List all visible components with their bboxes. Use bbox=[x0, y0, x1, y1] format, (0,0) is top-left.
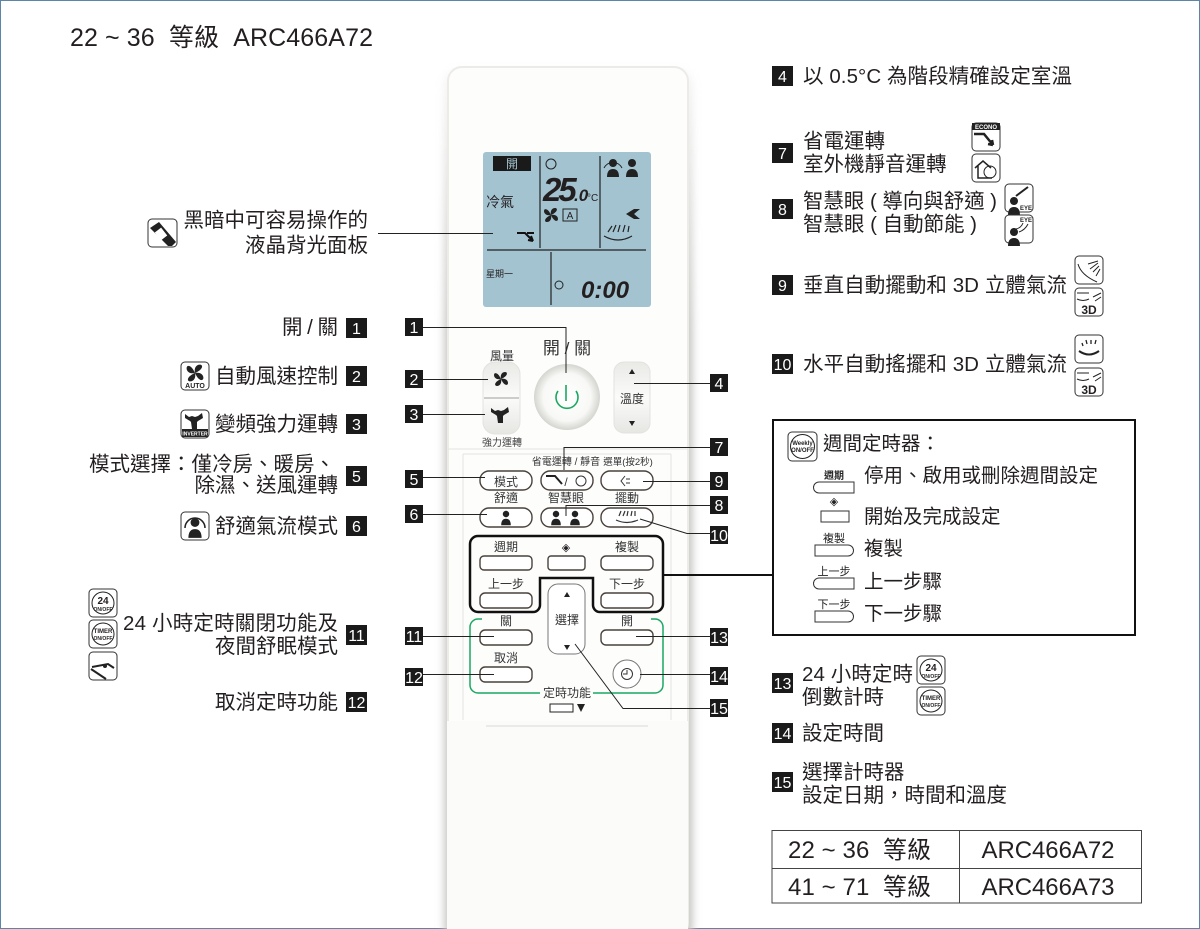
left: item 6: 舒適氣流模式 bbox=[215, 515, 338, 538]
timer button group outline bbox=[470, 614, 663, 712]
right: item 4: 以 0.5°C 為階段精確設定室溫 bbox=[803, 65, 1072, 88]
battery cover bbox=[447, 721, 688, 929]
row: next step bbox=[815, 598, 942, 625]
timer button group outline: 開 bbox=[621, 614, 633, 628]
row: weekly setting: 週期 bbox=[824, 469, 844, 482]
left: item 2: AUTO bbox=[185, 383, 205, 390]
left: item 11: ON/OFF bbox=[94, 636, 112, 642]
row: copy: 複製 bbox=[864, 538, 903, 560]
left: item 11: 夜間舒眠模式 bbox=[215, 635, 338, 658]
weekly timer button group outline: 複製 bbox=[615, 539, 639, 554]
upper button panel: / bbox=[564, 475, 568, 489]
right: item 8 bbox=[772, 184, 1033, 246]
right: item 7: 省電運轉 bbox=[803, 130, 885, 153]
right: item 7 bbox=[772, 123, 1000, 182]
right: item 13: ON/OFF bbox=[922, 674, 940, 680]
right: item 13 bbox=[772, 656, 945, 715]
callout tags on remote: 6 bbox=[410, 507, 419, 524]
callout tags on remote bbox=[405, 318, 728, 718]
weekly timer button group outline: 下一步 bbox=[609, 577, 645, 591]
left: item 11: 11 bbox=[348, 628, 365, 645]
right: item 13: ON/OFF bbox=[922, 703, 940, 709]
right: item 9: 垂直自動擺動和 3D 立體氣流 bbox=[803, 274, 1067, 297]
callout tags on remote: 4 bbox=[715, 376, 724, 393]
weekly timer button group outline: 週期 bbox=[494, 539, 518, 554]
left: item 1 bbox=[282, 316, 367, 339]
weekly timer button group outline bbox=[470, 536, 663, 612]
callout tags on remote: 1 bbox=[410, 320, 419, 337]
left: item 3: 變頻強力運轉 bbox=[215, 413, 338, 436]
left: item 11: TIMER bbox=[94, 629, 113, 635]
left: item 6: 6 bbox=[352, 519, 361, 536]
callout tags on remote: 12 bbox=[405, 670, 423, 687]
callout tags on remote: 5 bbox=[410, 472, 419, 489]
left: item 3 bbox=[181, 410, 367, 438]
row: previous step: 上一步驟 bbox=[864, 571, 942, 593]
left: item 11 bbox=[89, 589, 367, 680]
row: start and finish: 開始及完成設定 bbox=[864, 506, 1001, 528]
remote control bbox=[444, 67, 693, 929]
left: item 1: 開 / 關 bbox=[282, 316, 338, 339]
LCD screen: 25 bbox=[542, 171, 577, 208]
right: item 9: 9 bbox=[778, 278, 787, 295]
upper button panel: 舒適 bbox=[494, 490, 518, 505]
weekly timer button group outline: ◈ bbox=[562, 542, 571, 554]
model table: ARC466A72 bbox=[982, 837, 1114, 864]
right: item 10: 水平自動搖擺和 3D 立體氣流 bbox=[803, 353, 1067, 376]
right: item 8: 8 bbox=[778, 202, 787, 219]
model table bbox=[772, 830, 1142, 903]
row: weekly setting bbox=[814, 465, 1098, 493]
upper button panel: 擺動 bbox=[615, 490, 639, 505]
LCD screen: .0 bbox=[574, 186, 589, 205]
row: copy bbox=[815, 531, 903, 560]
weekly timer button group outline: 上一步 bbox=[488, 577, 524, 591]
panel: weekly timer bbox=[773, 420, 1135, 635]
callout tags on remote: 2 bbox=[410, 372, 419, 389]
callout tags on remote: 3 bbox=[410, 407, 419, 424]
left: item 11: 24 bbox=[97, 596, 109, 607]
left: item 3: INVERTER bbox=[182, 432, 208, 438]
right: item 14: 14 bbox=[774, 726, 792, 743]
left: item 11: ON/OFF bbox=[94, 607, 112, 613]
right: item 8: 智慧眼 ( 自動節能 ) bbox=[803, 213, 977, 236]
right: item 15: 15 bbox=[774, 775, 792, 792]
right: item 15: 設定日期，時間和溫度 bbox=[802, 784, 1007, 807]
heading: 週間定時器： bbox=[823, 433, 940, 455]
timer button group outline: 取消 bbox=[494, 651, 518, 665]
right: item 7: 7 bbox=[778, 146, 787, 163]
left: backlight label: 液晶背光面板 bbox=[245, 234, 368, 257]
LCD screen: 星期一 bbox=[486, 269, 513, 279]
leader lines bbox=[378, 234, 773, 708]
upper button panel: 智慧眼 bbox=[548, 490, 584, 505]
left: item 5: 5 bbox=[352, 469, 361, 486]
row: previous step: 上一步 bbox=[818, 565, 850, 578]
left: item 6 bbox=[181, 512, 367, 540]
left: item 5 bbox=[89, 453, 367, 497]
left: item 12: 12 bbox=[348, 695, 366, 712]
callout tags on remote: 11 bbox=[406, 629, 422, 646]
right: item 9: 3D bbox=[1081, 303, 1097, 317]
upper button panel: 選單(按2秒) bbox=[603, 456, 653, 468]
fan and powerful rocker button bbox=[482, 349, 522, 449]
right: item 15: 選擇計時器 bbox=[802, 761, 904, 784]
icon: weekly on/off: ON/OFF bbox=[791, 448, 814, 454]
LCD screen: °C bbox=[587, 193, 598, 204]
left: item 5: 除濕、送風運轉 bbox=[194, 474, 338, 497]
left: item 12: 取消定時功能 bbox=[215, 691, 338, 714]
right: item 13: 24 小時定時 bbox=[802, 663, 913, 686]
temperature button bbox=[614, 362, 650, 433]
right: item 7: 室外機靜音運轉 bbox=[803, 153, 946, 176]
right: item 10: 3D bbox=[1081, 383, 1097, 397]
right: item 15 bbox=[772, 761, 1007, 807]
callout tags on remote: 8 bbox=[715, 498, 724, 515]
row: next step: 下一步 bbox=[818, 598, 850, 611]
callout tags on remote: 7 bbox=[715, 440, 724, 457]
left: item 5: 模式選擇：僅冷房、暖房、 bbox=[89, 453, 335, 476]
upper button panel bbox=[448, 449, 688, 720]
LCD screen: 開 bbox=[506, 157, 518, 171]
LCD screen: 冷氣 bbox=[486, 194, 514, 210]
row: previous step bbox=[814, 565, 942, 593]
upper button panel: 省電運轉 / 靜音 bbox=[532, 455, 600, 468]
right: item 13: 倒數計時 bbox=[802, 686, 884, 709]
power button bbox=[534, 339, 600, 430]
left: item 2 bbox=[181, 362, 367, 390]
callout tags on remote: 15 bbox=[710, 701, 728, 718]
temperature button: 溫度 bbox=[620, 391, 644, 406]
model table: 41 ~ 71 等級 bbox=[788, 874, 931, 901]
row: start and finish: ◈ bbox=[830, 496, 839, 508]
left: backlight label: 黑暗中可容易操作的 bbox=[184, 209, 368, 232]
fan and powerful rocker button: 風量 bbox=[490, 349, 514, 363]
right: item 14: 設定時間 bbox=[802, 722, 884, 745]
LCD screen: A bbox=[567, 211, 574, 222]
right: item 13: TIMER bbox=[922, 696, 941, 702]
timer button group outline: 關 bbox=[500, 614, 512, 628]
callout tags on remote: 10 bbox=[710, 528, 728, 545]
row: start and finish bbox=[821, 496, 1001, 528]
left: item 3: 3 bbox=[352, 417, 361, 434]
right: item 8: EYE bbox=[1020, 206, 1032, 212]
row: copy: 複製 bbox=[823, 531, 845, 545]
callout tags on remote: 9 bbox=[715, 474, 724, 491]
right: item 13: 13 bbox=[774, 676, 792, 693]
model table: 22 ~ 36 等級 bbox=[788, 837, 931, 864]
right: item 8: 智慧眼 ( 導向與舒適 ) bbox=[803, 190, 997, 213]
title: 22 ~ 36 等級 ARC466A72 bbox=[70, 24, 373, 52]
right: item 10: 10 bbox=[774, 357, 792, 374]
LCD screen bbox=[483, 152, 651, 307]
callout tags on remote: 13 bbox=[710, 630, 728, 647]
row: weekly setting: 停用、啟用或刪除週間設定 bbox=[864, 465, 1098, 487]
icon: weekly on/off: Weekly bbox=[792, 441, 813, 447]
upper button panel: 模式 bbox=[494, 475, 518, 489]
right: item 9 bbox=[772, 256, 1103, 317]
right: item 13: 24 bbox=[925, 663, 937, 674]
select button: 選擇 bbox=[555, 612, 579, 627]
left: item 11: 24 小時定時關閉功能及 bbox=[123, 612, 338, 635]
right: item 7: ECONO bbox=[975, 125, 997, 131]
fan and powerful rocker button: 強力運轉 bbox=[482, 436, 522, 449]
left: item 2: 自動風速控制 bbox=[215, 365, 338, 388]
LCD screen: 0:00 bbox=[581, 277, 630, 304]
icon: weekly on/off bbox=[788, 432, 817, 461]
left: backlight label bbox=[148, 209, 368, 257]
left: item 2: 2 bbox=[352, 369, 361, 386]
callout tags on remote: 14 bbox=[710, 669, 728, 686]
select button bbox=[548, 584, 585, 654]
row: next step: 下一步驟 bbox=[864, 603, 942, 625]
right: item 10 bbox=[772, 335, 1103, 397]
model table: ARC466A73 bbox=[982, 874, 1114, 901]
power button: 開 / 關 bbox=[543, 339, 591, 358]
right: item 8: EYE bbox=[1020, 218, 1032, 224]
right: item 4: 4 bbox=[778, 69, 787, 86]
timer button group outline: 定時功能 bbox=[543, 685, 591, 700]
left: item 1: 1 bbox=[352, 321, 361, 338]
